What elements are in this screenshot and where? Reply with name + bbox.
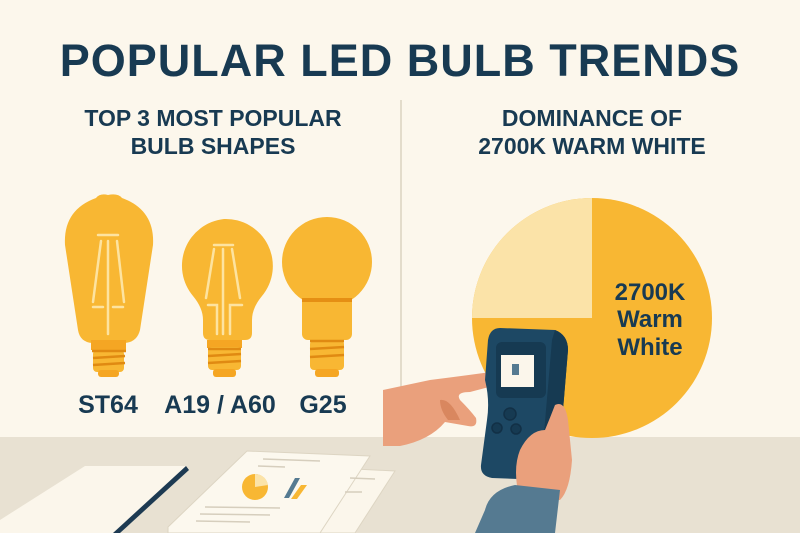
pie chart	[472, 198, 712, 438]
pie label	[615, 279, 686, 361]
bulb labels: ST64	[78, 391, 138, 419]
hand: holding	[475, 404, 572, 533]
bulb: G25	[282, 217, 372, 377]
bulb labels	[78, 391, 347, 419]
subtitle: bulb shapes: BULB SHAPES	[131, 133, 295, 159]
bulb labels: G25	[299, 391, 347, 419]
subtitle: 2700K	[478, 105, 706, 159]
report papers	[168, 451, 395, 533]
subtitle: bulb shapes	[84, 105, 342, 159]
title: POPULAR LED BULB TRENDS	[60, 35, 740, 86]
hand: pointing	[383, 370, 509, 446]
bulb labels: A19 / A60	[164, 391, 276, 419]
notebook	[0, 466, 189, 533]
pie label: White	[617, 334, 683, 361]
desk	[0, 437, 800, 533]
subtitle: 2700K: DOMINANCE OF	[502, 105, 682, 131]
pie label: 2700K	[615, 279, 686, 306]
pie label: Warm	[617, 306, 683, 333]
bulb: ST64	[65, 194, 153, 377]
device: light meter	[481, 328, 568, 480]
bulb: A19	[182, 219, 273, 377]
subtitle: 2700K: 2700K WARM WHITE	[478, 133, 706, 159]
subtitle: bulb shapes: TOP 3 MOST POPULAR	[84, 105, 342, 131]
